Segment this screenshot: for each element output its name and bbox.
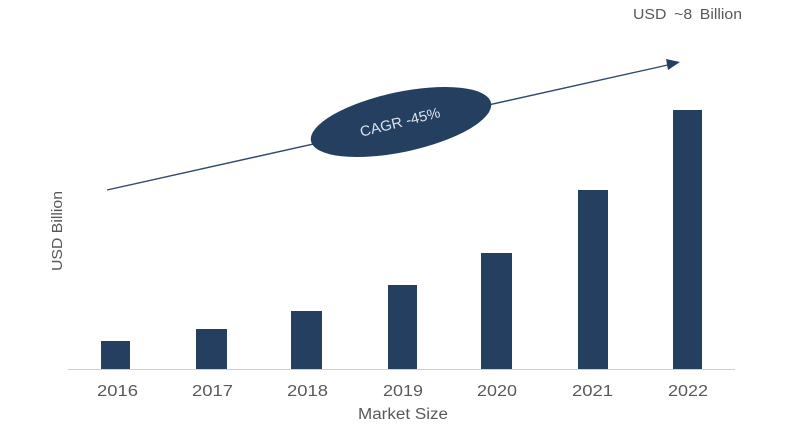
top value label: USD ~8 Billion (633, 7, 742, 23)
CAGR ellipse callout (305, 74, 497, 170)
year labels: 2018 (287, 383, 328, 400)
year labels: 2016 (97, 383, 138, 400)
y axis title: USD Billion (49, 191, 66, 271)
growth arrow (107, 59, 680, 190)
x axis line (68, 368, 735, 370)
year labels: 2022 (668, 383, 708, 400)
year labels: 2021 (572, 383, 613, 400)
bars (101, 110, 702, 369)
year labels: 2019 (383, 383, 423, 400)
year labels (97, 383, 708, 400)
year labels: 2020 (477, 383, 517, 400)
x axis title: Market Size (358, 406, 448, 423)
CAGR ellipse callout: CAGR -45% (359, 105, 442, 141)
year labels: 2017 (192, 383, 233, 400)
